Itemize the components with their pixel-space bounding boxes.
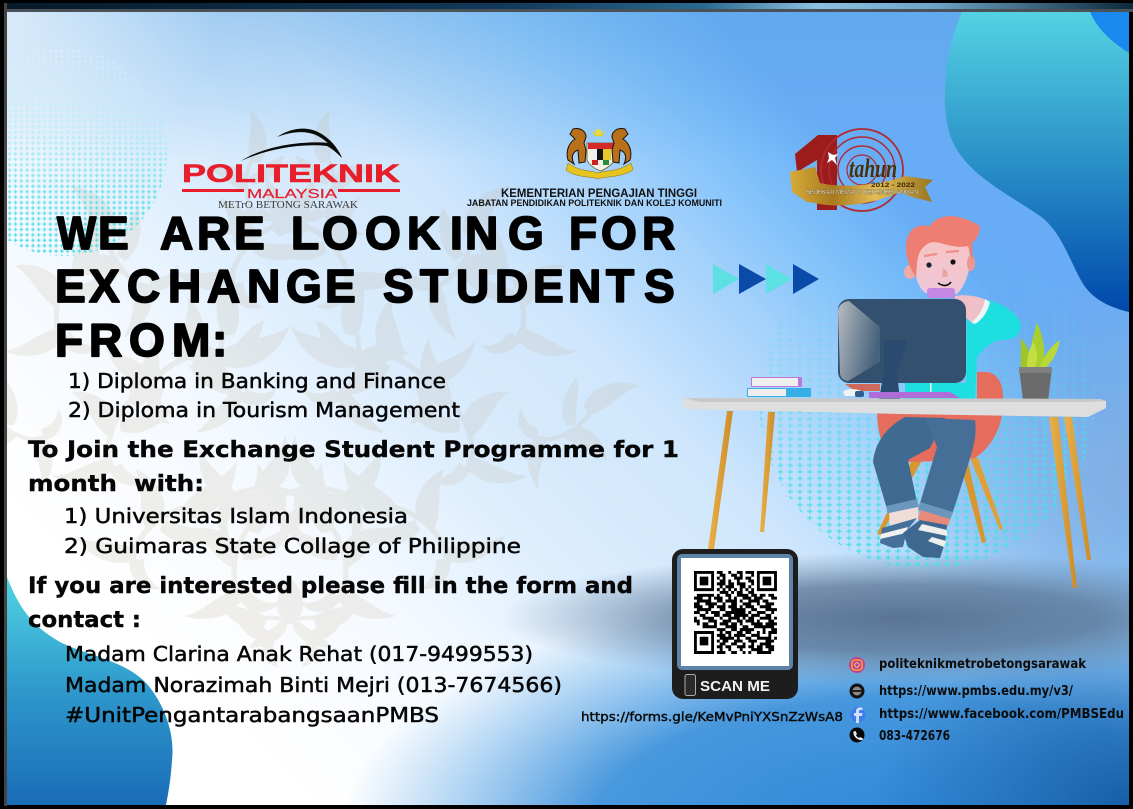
head [904,216,980,297]
call to action: If you are interested please fill in the form and [28,573,633,599]
chair [877,372,1003,543]
social contacts [849,657,1124,744]
plant [1019,323,1060,401]
call to action [28,573,633,633]
diploma list: 2) Diploma in Tourism Management [68,398,460,422]
programme statement: month with: [28,471,204,497]
arrows [713,264,819,294]
QR card [672,549,798,699]
blob: top right [945,12,1129,312]
contact names: Madam Clarina Anak Rehat (017-9499553) [65,642,533,666]
icon: instagram [849,657,865,673]
monitor [838,299,966,400]
icon: phone [850,728,864,742]
shirt seam [930,383,932,392]
ministry name: JABATAN PENDIDIKAN POLITEKNIK DAN KOLEJ KOMUNITI [467,198,722,208]
legs [873,417,976,558]
icon: website [850,684,864,698]
contact names: #UnitPengantarabangsaanPMBS [65,703,439,727]
halftone dots: behind character [760,288,1095,569]
title: W [57,208,97,260]
partner universities: 2) Guimaras State Collage of Philippine [64,534,521,558]
call to action: contact : [28,607,141,633]
left shoe [880,518,917,548]
logo: Malaysia coat of arms [566,128,633,179]
diploma list: 1) Diploma in Banking and Finance [68,369,446,393]
icon: facebook [850,708,866,723]
title: FROM: [55,314,227,366]
title: E ARE LOOKING FOR [98,207,675,259]
partner universities [64,504,521,558]
halftone dots: top left [0,48,167,256]
diploma list [68,369,460,422]
keyboard [869,392,960,398]
logo: Politeknik Malaysia: POLITEKNIK [182,160,400,188]
partner universities: 1) Universitas Islam Indonesia [64,504,408,528]
ministry name: KEMENTERIAN PENGAJIAN TINGGI [501,186,697,200]
social contacts: https://www.pmbs.edu.my/v3/ [879,684,1073,699]
illustration: student at desk [682,216,1106,588]
logo: Politeknik Malaysia: METrO BETONG SARAWAK [218,199,358,211]
logo: 10 years anniversary: 2012 - 2022 [871,182,915,189]
ministry name [467,186,722,208]
cup [927,288,955,298]
blob: bottom left [7,577,173,805]
logo: 10 years anniversary: tahun [849,154,897,183]
social contacts: 083-472676 [879,729,950,744]
programme statement: To Join the Exchange Student Programme for 1 [28,437,679,463]
title [55,207,675,366]
books [747,377,811,397]
form url: https://forms.gle/KeMvPniYXSnZzWsA8 [581,710,843,724]
logo: 10 years anniversary: SEDEKAD MEMACU KECEMERLANGAN [806,190,918,196]
phone icon [685,674,696,696]
hand and mouse [843,384,880,397]
logo swoosh [241,129,342,161]
logo: Politeknik Malaysia: MALAYSIA [247,186,337,201]
batik watermark [0,107,647,679]
social contacts: politeknikmetrobetongsarawak [879,657,1086,672]
QR card: SCAN ME [700,679,770,695]
arm [955,295,986,324]
logo: Politeknik Malaysia [182,129,400,211]
contact names [65,642,562,727]
programme statement [28,437,679,497]
blob: top right corner [1090,12,1129,53]
contact names: Madam Norazimah Binti Mejri (013-7674566) [65,673,562,697]
logo: 10 years anniversary [790,129,933,211]
QR code [694,572,777,653]
title: EXCHANGE STUDENTS [55,260,675,312]
torso [905,300,1021,400]
desk [682,398,1106,588]
right shoe [903,520,947,558]
